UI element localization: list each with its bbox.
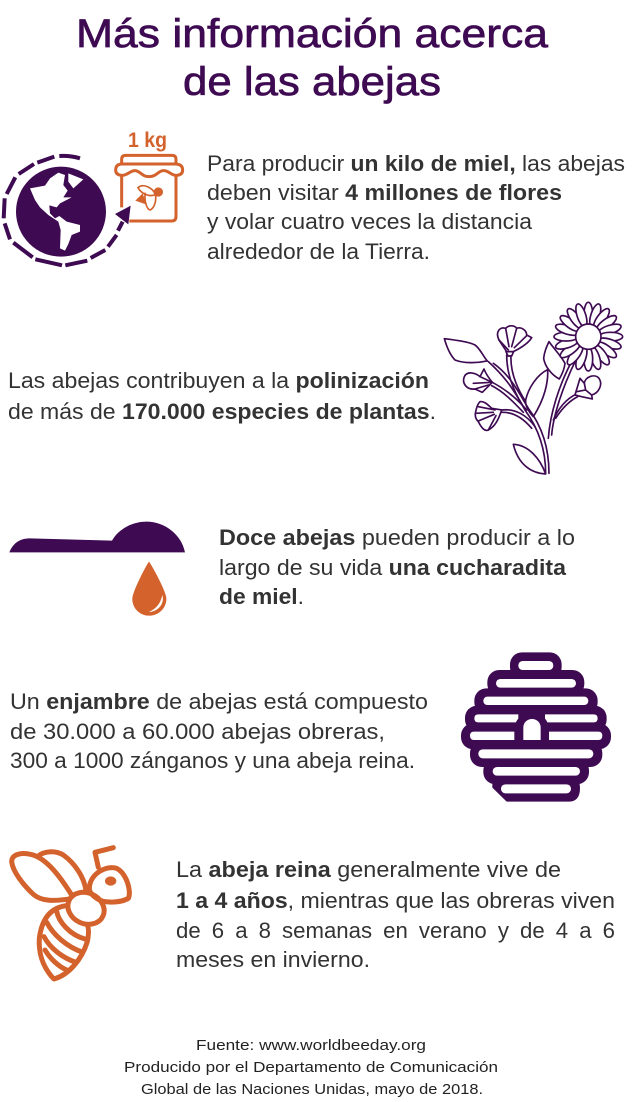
icon: honey jar bbox=[116, 155, 183, 221]
text block: queen bee: La abeja reina generalmente vive de bbox=[176, 857, 561, 882]
spoon bbox=[9, 522, 185, 552]
label: 1 kg: 1 kg bbox=[128, 129, 167, 152]
left bud bbox=[464, 369, 492, 392]
text block: queen bee: meses en invierno. bbox=[176, 947, 370, 972]
text block: honey fact bbox=[207, 151, 625, 264]
text block: swarm: 300 a 1000 zánganos y una abeja reina. bbox=[10, 748, 415, 773]
leaves bbox=[444, 339, 487, 363]
text block: swarm bbox=[10, 689, 428, 773]
icon: bee bbox=[12, 848, 129, 979]
title bbox=[76, 12, 549, 104]
lower bud bbox=[475, 402, 502, 430]
title: Más información acerca bbox=[76, 12, 549, 56]
text block: pollination: Las abejas contribuyen a la polinización bbox=[8, 368, 429, 393]
icon: flowers bbox=[444, 302, 623, 474]
icon: globe and honey jar bbox=[4, 129, 183, 265]
text block: pollination bbox=[8, 368, 436, 424]
text block: spoonful: Doce abejas pueden producir a lo bbox=[219, 525, 575, 550]
icon: globe bbox=[16, 167, 106, 257]
footer: source: Fuente: www.worldbeeday.org bbox=[196, 1037, 426, 1054]
footer: source: Global de las Naciones Unidas, mayo de 2018. bbox=[141, 1081, 483, 1098]
icon: bee on jar bbox=[135, 186, 163, 210]
text block: honey fact: deben visitar 4 millones de flores bbox=[207, 180, 562, 205]
title: de las abejas bbox=[183, 60, 441, 104]
footer: source bbox=[124, 1037, 498, 1098]
text block: honey fact: y volar cuatro veces la distancia bbox=[207, 209, 532, 234]
wings bbox=[12, 852, 86, 900]
hive door bbox=[514, 713, 549, 740]
icon: beehive bbox=[461, 652, 611, 802]
text block: queen bee: de 6 a 8 semanas en verano y de 4 a 6 bbox=[176, 918, 615, 943]
antenna bbox=[95, 848, 113, 867]
stems bbox=[488, 355, 578, 473]
head bbox=[89, 868, 129, 902]
right bud bbox=[575, 376, 601, 399]
text block: queen bee: 1 a 4 años, mientras que las obreras viven bbox=[176, 888, 615, 913]
text block: swarm: de 30.000 a 60.000 abejas obreras, bbox=[10, 719, 385, 744]
eye bbox=[105, 876, 116, 886]
abdomen bbox=[39, 906, 88, 979]
daisy bbox=[554, 302, 623, 371]
icon: spoon with honey drop bbox=[9, 522, 185, 616]
footer: source: Producido por el Departamento de Comunicación bbox=[124, 1059, 498, 1076]
text block: pollination: de más de 170.000 especies de plantas . bbox=[8, 399, 436, 424]
text block: swarm: Un enjambre de abejas está compuesto bbox=[10, 689, 428, 714]
text block: honey fact: alrededor de la Tierra. bbox=[207, 239, 430, 264]
honey drop bbox=[132, 562, 166, 616]
top bud bbox=[498, 326, 532, 356]
text block: honey fact: Para producir un kilo de miel, las abejas bbox=[207, 151, 625, 176]
text block: spoonful bbox=[219, 525, 575, 609]
arrow: dashed orbit bbox=[4, 156, 131, 265]
text block: queen bee bbox=[176, 857, 615, 972]
text block: spoonful: largo de su vida una cucharadita bbox=[219, 555, 566, 580]
thorax bbox=[63, 887, 109, 930]
text block: spoonful: de miel. bbox=[219, 584, 304, 609]
